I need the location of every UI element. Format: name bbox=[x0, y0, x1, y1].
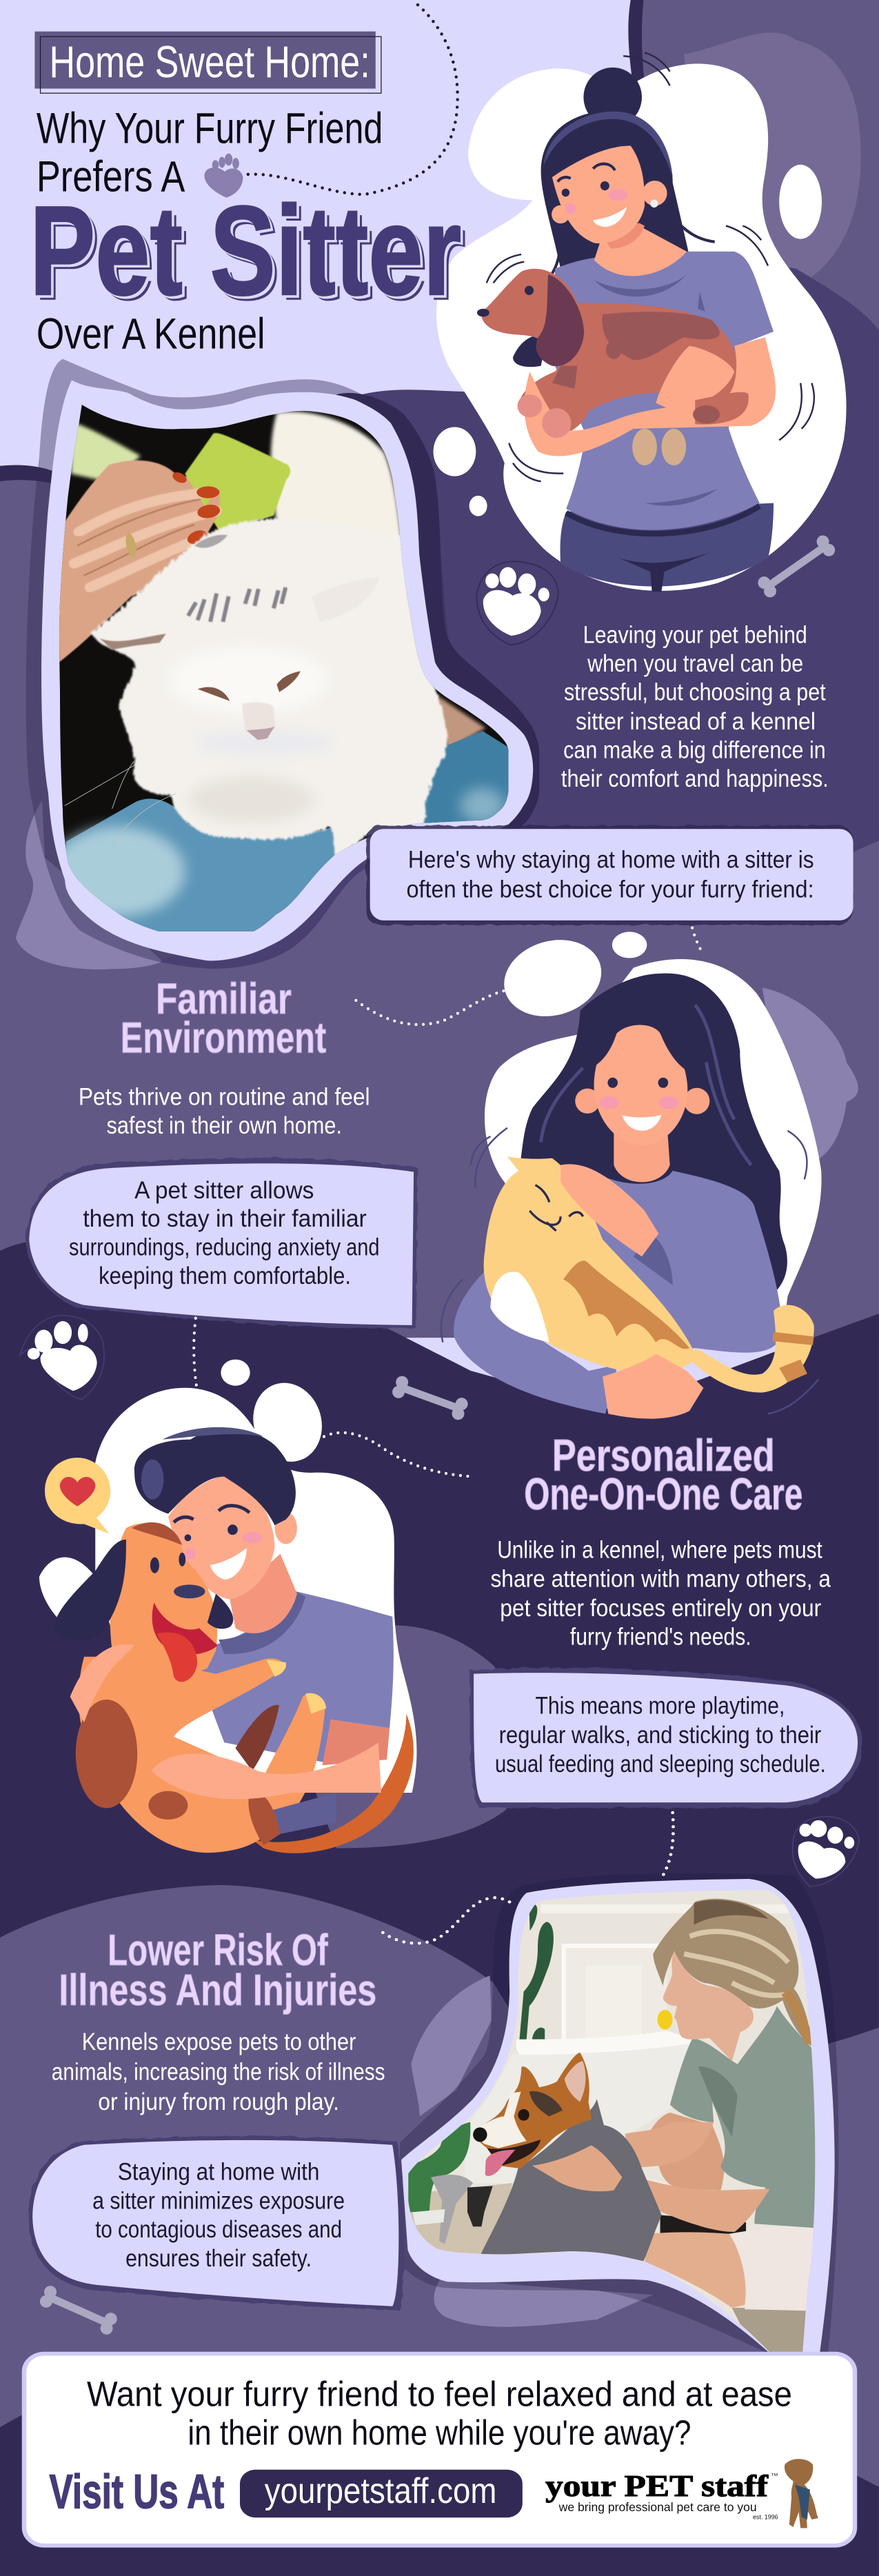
heading bbox=[59, 1926, 376, 2015]
callout: regular walks, and sticking to their bbox=[499, 1722, 821, 1749]
paragraph: Pets thrive on routine and feel bbox=[79, 1084, 370, 1111]
heading bbox=[524, 1431, 802, 1519]
motion lines bbox=[487, 52, 814, 481]
callout: here's why: often the best choice for your furry friend: bbox=[406, 876, 814, 903]
title line: why your furry friend: Why Your Furry Friend bbox=[37, 105, 383, 152]
title: pet sitter: Pet Sitter bbox=[30, 179, 461, 321]
ginger cat bbox=[484, 1156, 814, 1393]
intro paragraph: stressful, but choosing a pet bbox=[564, 679, 826, 706]
callout: ensures their safety. bbox=[125, 2245, 312, 2271]
illustration: woman hugging cat bbox=[441, 929, 858, 1419]
callout: to contagious diseases and bbox=[95, 2216, 342, 2242]
panel: call to action bbox=[24, 2354, 855, 2546]
paragraph: safest in their own home. bbox=[106, 1113, 342, 1139]
personalized care section bbox=[469, 1431, 862, 1808]
illustration: woman holding dachshund bbox=[436, 52, 847, 592]
hair bbox=[489, 974, 787, 1302]
hair bbox=[541, 68, 715, 283]
intro paragraph: Leaving your pet behind bbox=[583, 622, 807, 649]
intro paragraph: their comfort and happiness. bbox=[561, 766, 829, 792]
callout: This means more playtime, bbox=[536, 1693, 785, 1720]
paragraph: Unlike in a kennel, where pets must bbox=[497, 1537, 822, 1563]
website pill: yourpetstaff.com bbox=[265, 2471, 496, 2511]
shirt bbox=[555, 252, 774, 530]
white blob bbox=[39, 1388, 416, 1793]
paragraph: or injury from rough play. bbox=[98, 2089, 339, 2115]
dachshund bbox=[477, 269, 749, 465]
intro paragraph bbox=[561, 622, 829, 792]
callout: here's why bbox=[366, 825, 853, 925]
arm and hand bbox=[517, 337, 776, 456]
question text: in their own home while you're away? bbox=[188, 2413, 691, 2453]
section: lower risk bbox=[28, 1926, 404, 2311]
white blob bbox=[485, 959, 822, 1320]
dotted line: bubble to heading bbox=[324, 1433, 474, 1477]
logo: TM bbox=[771, 2473, 778, 2477]
paragraph: animals, increasing the risk of illness bbox=[52, 2059, 385, 2085]
paragraph: pet sitter focuses entirely on your bbox=[500, 1596, 821, 1622]
paragraph bbox=[490, 1537, 831, 1650]
shadow head bbox=[762, 988, 858, 1159]
panel: cat grooming photo bbox=[26, 359, 539, 969]
title badge bbox=[34, 32, 381, 93]
visit us at: Visit Us At bbox=[50, 2464, 224, 2519]
section: familiar environment bbox=[26, 928, 703, 1388]
neck and face bbox=[552, 145, 687, 276]
title line: over a kennel: Over A Kennel bbox=[37, 310, 265, 359]
heading: Familiar bbox=[156, 975, 292, 1023]
callout bbox=[26, 1158, 418, 1328]
logo: we bring professional pet care to you bbox=[558, 2500, 757, 2514]
callout: usual feeding and sleeping schedule. bbox=[495, 1751, 826, 1778]
thought bubbles and decorative shapes, top bbox=[434, 165, 822, 516]
panel: bath photo bbox=[400, 1873, 841, 2363]
callout bbox=[28, 2136, 404, 2311]
callout: here's why: Here's why staying at home with a sitter is bbox=[408, 847, 814, 874]
dotted line: top curve bbox=[247, 5, 458, 194]
question text bbox=[87, 2375, 792, 2453]
paragraph bbox=[52, 2029, 385, 2115]
shadow blob bbox=[281, 1625, 560, 1848]
dotted line: callout to bubble bbox=[194, 928, 703, 1388]
heading: Illness And Injuries bbox=[59, 1966, 376, 2015]
logo: est. 1996 bbox=[753, 2514, 778, 2521]
icon: paw, upper bbox=[476, 561, 558, 645]
heart speech bubble bbox=[45, 1458, 110, 1533]
icon: bone, middle bbox=[391, 1374, 469, 1422]
intro paragraph: can make a big difference in bbox=[563, 737, 826, 763]
callout bbox=[469, 1668, 862, 1808]
man's arms bbox=[70, 1644, 381, 1799]
icon: bone, lower bbox=[38, 2284, 119, 2337]
heading: Environment bbox=[121, 1014, 326, 1062]
neck and face bbox=[575, 1011, 709, 1183]
paragraph: Kennels expose pets to other bbox=[82, 2029, 356, 2055]
motion lines bbox=[441, 1128, 818, 1413]
callout: a sitter minimizes exposure bbox=[92, 2187, 345, 2214]
heading: Personalized bbox=[552, 1431, 775, 1480]
icon: bone, upper bbox=[756, 533, 838, 600]
pants bbox=[560, 503, 774, 586]
paragraph: share attention with many others, a bbox=[490, 1566, 831, 1593]
callout: surroundings, reducing anxiety and bbox=[69, 1234, 379, 1261]
icon: purple paw bbox=[204, 154, 243, 198]
heading bbox=[121, 975, 326, 1062]
icon: paw, right bbox=[793, 1817, 859, 1886]
callout: them to stay in their familiar bbox=[83, 1206, 367, 1232]
title block bbox=[30, 32, 461, 359]
callout: Staying at home with bbox=[118, 2158, 319, 2185]
intro paragraph: sitter instead of a kennel bbox=[576, 709, 816, 735]
thought bubbles bbox=[221, 1360, 332, 1471]
dotted lines: bath photo connectors bbox=[383, 1813, 674, 1943]
paragraph bbox=[79, 1084, 370, 1139]
title badge: Home Sweet Home: bbox=[50, 37, 370, 87]
heading: Lower Risk Of bbox=[108, 1926, 328, 1975]
intro paragraph: when you travel can be bbox=[587, 651, 803, 677]
man bbox=[134, 1427, 394, 1765]
paragraph: furry friend's needs. bbox=[570, 1624, 751, 1650]
icon: paw, left bbox=[19, 1316, 104, 1400]
logo: your PET staff bbox=[545, 2469, 769, 2503]
dog bbox=[53, 1522, 414, 1853]
callout: A pet sitter allows bbox=[134, 1177, 314, 1204]
callout: keeping them comfortable. bbox=[99, 1263, 351, 1289]
hands bbox=[560, 1164, 703, 1419]
website pill bbox=[240, 2470, 523, 2517]
logo bbox=[545, 2459, 818, 2528]
sweater bbox=[454, 1171, 782, 1413]
illustration: man hugging dog bbox=[39, 1360, 560, 1853]
thought bubbles bbox=[496, 929, 647, 1027]
white blob bbox=[436, 63, 847, 591]
title line: prefers a: Prefers A bbox=[37, 153, 185, 201]
